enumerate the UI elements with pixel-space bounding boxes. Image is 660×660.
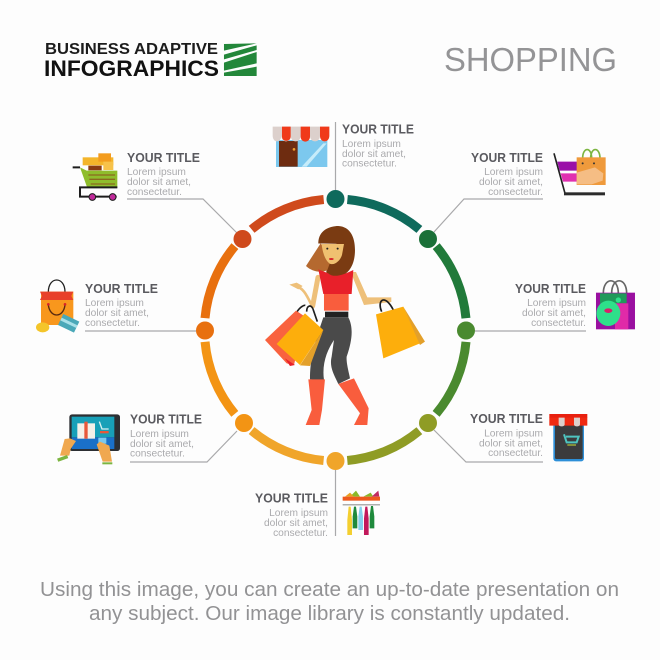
text: north-east: dolor sit amet, xyxy=(479,177,543,188)
text: north: Lorem ipsum xyxy=(342,139,401,150)
text: south-west: consectetur. xyxy=(130,448,185,460)
icon: bag, coins and card xyxy=(36,280,79,333)
text: south-west: dolor sit amet, xyxy=(130,439,194,450)
text: south xyxy=(255,492,328,539)
text: north-west: YOUR TITLE xyxy=(127,151,200,165)
item: south-east xyxy=(470,412,587,461)
item: south-west xyxy=(57,412,202,464)
footer text: any subject. Our image library is constantly updated. xyxy=(89,603,570,625)
item: north-east xyxy=(471,150,606,198)
text: east: Lorem ipsum xyxy=(527,298,586,309)
text: east: YOUR TITLE xyxy=(515,282,586,296)
text: north-east xyxy=(471,151,543,198)
text: south-east: dolor sit amet, xyxy=(479,438,543,450)
illustration: woman with shopping bags xyxy=(265,226,425,425)
icon: phone storefront xyxy=(549,414,587,461)
icon: purple shopping bag xyxy=(596,281,635,329)
ring nodes xyxy=(196,190,475,470)
text: south: YOUR TITLE xyxy=(255,492,328,506)
text: south-east: Lorem ipsum xyxy=(484,428,543,440)
text: south-east: consectetur. xyxy=(488,448,543,459)
text: west: dolor sit amet, xyxy=(85,308,149,319)
header: brand title xyxy=(44,41,219,81)
text: north-west xyxy=(127,151,200,198)
item: east xyxy=(515,281,635,329)
text: north-east: YOUR TITLE xyxy=(471,151,543,165)
item: west xyxy=(36,280,158,333)
text: north: consectetur. xyxy=(342,158,397,170)
text: north xyxy=(342,122,414,170)
text: north-east: Lorem ipsum xyxy=(484,167,543,178)
text: north-west: consectetur. xyxy=(127,187,182,198)
icon: tablet with hands xyxy=(57,414,120,464)
circular ring of arcs and nodes xyxy=(184,178,487,482)
heading: shopping: SHOPPING xyxy=(444,41,617,78)
text: north: YOUR TITLE xyxy=(342,122,414,136)
icon: clothes rack xyxy=(343,491,380,535)
text: south: dolor sit amet, xyxy=(264,518,328,529)
connector lines xyxy=(85,122,586,536)
header: brand title: INFOGRAPHICS xyxy=(44,56,219,81)
text: south-west xyxy=(130,412,202,460)
footer text xyxy=(40,579,619,625)
text: north-west: dolor sit amet, xyxy=(127,177,191,188)
text: north-west: Lorem ipsum xyxy=(127,167,186,178)
item: north-west xyxy=(73,151,200,200)
text: south-west: Lorem ipsum xyxy=(130,429,189,440)
icon: storefront xyxy=(273,127,329,167)
text: south-west: YOUR TITLE xyxy=(130,412,202,426)
icon: shopping cart xyxy=(73,153,117,200)
header: brand title: BUSINESS ADAPTIVE xyxy=(45,41,218,58)
item: north xyxy=(273,122,414,170)
text: east: consectetur. xyxy=(531,318,586,329)
item: south xyxy=(255,491,380,539)
footer text: Using this image, you can create an up-to-date presentation on xyxy=(40,579,619,601)
text: south-east xyxy=(470,412,543,459)
text: east: dolor sit amet, xyxy=(522,308,586,319)
text: east xyxy=(515,282,586,329)
text: west: Lorem ipsum xyxy=(85,298,144,309)
icon: green striped logo xyxy=(224,43,257,76)
text: south-east: YOUR TITLE xyxy=(470,412,543,426)
text: west xyxy=(85,282,158,329)
text: south: Lorem ipsum xyxy=(269,508,328,519)
text: west: consectetur. xyxy=(85,318,140,329)
text: north: dolor sit amet, xyxy=(342,149,406,160)
ring arcs xyxy=(184,178,487,482)
text: west: YOUR TITLE xyxy=(85,282,158,296)
icon: laptop with bag xyxy=(554,150,606,195)
text: north-east: consectetur. xyxy=(488,187,543,198)
text: south: consectetur. xyxy=(273,528,328,539)
